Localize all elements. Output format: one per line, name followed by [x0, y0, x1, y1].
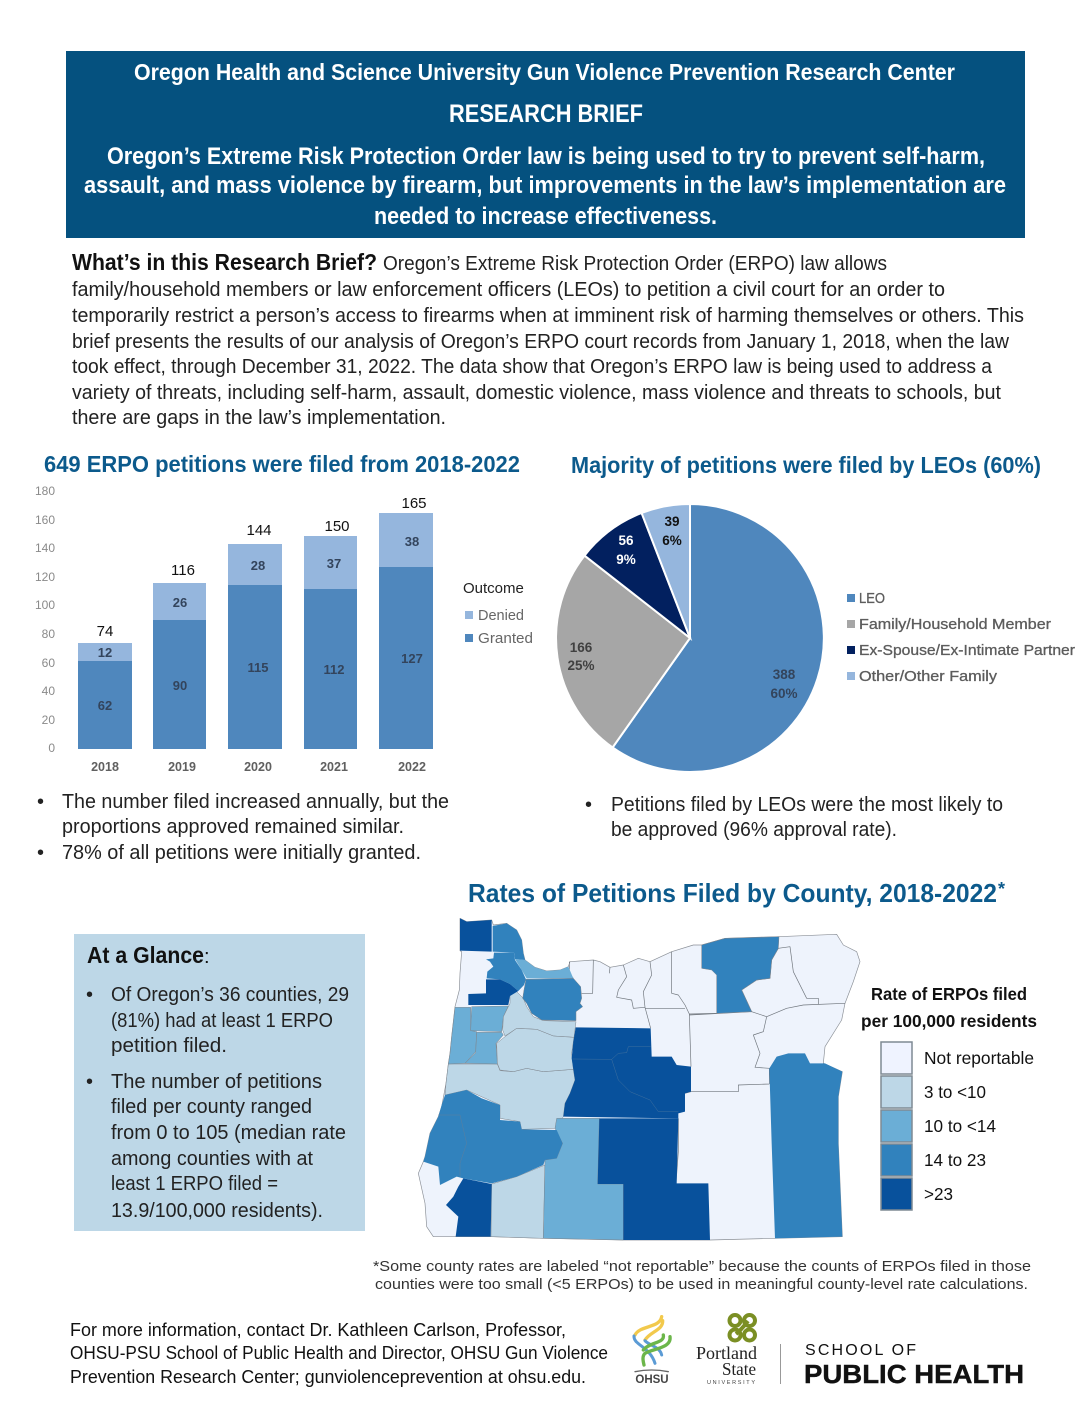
outcome legend: Granted: [478, 631, 533, 647]
logo: Portland State University: State: [722, 1359, 756, 1379]
bars 2022: 2022: [398, 760, 426, 774]
pie legend: LEO: [859, 591, 885, 607]
pie legend: [847, 591, 1075, 685]
bullet under pie chart: [585, 794, 1003, 841]
contact information: OHSU-PSU School of Public Health and Director, OHSU Gun Violence: [70, 1342, 608, 1363]
map legend: 14 to 23: [924, 1150, 986, 1170]
bullet under pie chart: Petitions filed by LEOs were the most likely to: [611, 794, 1003, 816]
bars 2022: 38: [405, 534, 419, 549]
bars 2018: 62: [98, 698, 112, 713]
counties: over 23: [446, 918, 710, 1240]
logo: Portland State University: UNIVERSITY: [707, 1380, 755, 1386]
logo: Portland State University: [696, 1315, 757, 1386]
bars 2020: 28: [251, 558, 265, 573]
bullets under bar chart: The number filed increased annually, but the: [62, 791, 449, 813]
bars 2018: 2018: [91, 760, 119, 774]
heading: county map: *: [998, 879, 1005, 899]
pie labels: 39: [664, 514, 680, 529]
intro text block: took effect, through December 31, 2022. The data show that Oregon’s ERPO law is being used to address a: [72, 356, 993, 378]
logo: School of Public Health: [804, 1342, 1024, 1389]
footnote: counties were too small (<5 ERPOs) to be used in meaningful county-level rate calculations.: [375, 1276, 1028, 1293]
bullets under bar chart: proportions approved remained similar.: [62, 816, 404, 838]
y axis labels: 80: [42, 627, 55, 641]
bars 2021: 112: [324, 662, 344, 677]
intro text block: brief presents the results of our analysis of Oregon’s ERPO court records from January 1, 2018, when the law: [72, 331, 1010, 353]
y axis labels: 100: [35, 598, 55, 612]
bullets under bar chart: 78% of all petitions were initially granted.: [62, 842, 421, 864]
at a glance panel: •: [86, 984, 93, 1006]
bullet under pie chart: be approved (96% approval rate).: [611, 819, 897, 841]
contact information: [70, 1319, 608, 1387]
bars 2021: [304, 518, 357, 774]
header: headline finding: needed to increase effectiveness.: [374, 203, 717, 230]
bars 2020: 115: [248, 660, 268, 675]
outcome legend: Denied: [478, 608, 524, 624]
choropleth map of Oregon counties: [418, 918, 860, 1240]
heading: petitions filed: 649 ERPO petitions were filed from 2018-2022: [44, 451, 520, 477]
pie legend: Family/Household Member: [859, 617, 1051, 633]
header: headline finding: [84, 143, 1006, 230]
bars 2019: 26: [173, 595, 187, 610]
bullets under bar chart: [37, 791, 449, 864]
intro text block: What’s in this Research Brief?: [72, 249, 377, 275]
logo: OHSU: [634, 1317, 670, 1386]
bars 2019: 116: [171, 562, 195, 579]
bars 2022: 165: [401, 495, 427, 512]
intro text block: variety of threats, including self-harm, assault, domestic violence, mass violence and threats to schools, but: [72, 382, 1001, 404]
logo: School of Public Health: SCHOOL OF: [805, 1342, 916, 1359]
at a glance panel: (81%) had at least 1 ERPO: [111, 1010, 333, 1032]
pie legend: Other/Other Family: [859, 669, 998, 685]
intro text block: Oregon’s Extreme Risk Protection Order (ERPO) law allows: [383, 253, 887, 275]
heading: county map: Rates of Petitions Filed by County, 2018-2022: [468, 878, 997, 908]
logo: OHSU: OHSU: [635, 1374, 669, 1386]
header banner: [66, 51, 1025, 238]
at a glance panel: 13.9/100,000 residents).: [111, 1200, 323, 1222]
map legend: Not reportable: [924, 1048, 1034, 1068]
bars 2021: 2021: [320, 760, 348, 774]
header: research brief label: RESEARCH BRIEF: [449, 100, 643, 128]
bullets under bar chart: •: [37, 791, 44, 813]
bars 2021: 37: [327, 556, 341, 571]
pie labels: 6%: [662, 533, 682, 548]
pie labels: 9%: [616, 552, 636, 567]
intro text block: family/household members or law enforcement officers (LEOs) to petition a civil court for an order to: [72, 279, 945, 301]
counties: 10 to under 14: [448, 959, 623, 1240]
y axis labels: 0: [48, 741, 55, 755]
pie labels: 60%: [770, 686, 798, 701]
y axis labels: 20: [42, 713, 55, 727]
outcome legend: Outcome: [463, 580, 524, 597]
map legend: Rate of ERPOs filed: [871, 984, 1027, 1004]
at a glance panel: [74, 934, 365, 1231]
counties: 14 to 23: [423, 923, 842, 1238]
map legend: >23: [924, 1184, 953, 1204]
map legend: [861, 984, 1037, 1210]
y axis labels: 180: [35, 484, 55, 498]
pie chart: petitioner type: [556, 504, 1075, 772]
at a glance panel: At a Glance: [87, 942, 204, 968]
bars 2019: 90: [173, 678, 187, 693]
at a glance panel: from 0 to 105 (median rate: [111, 1122, 346, 1144]
y axis labels: 60: [42, 656, 55, 670]
at a glance panel: least 1 ERPO filed =: [111, 1173, 278, 1195]
bars 2020: 144: [246, 522, 272, 539]
contact information: For more information, contact Dr. Kathleen Carlson, Professor,: [70, 1319, 566, 1340]
pie legend: Ex-Spouse/Ex-Intimate Partner: [859, 643, 1075, 659]
bars 2022: [379, 495, 433, 774]
y axis labels: 160: [35, 513, 55, 527]
header: headline finding: assault, and mass violence by firearm, but improvements in the law’s implementation are: [84, 172, 1006, 199]
logo: School of Public Health: PUBLIC HEALTH: [804, 1361, 1024, 1389]
header: organisation name: Oregon Health and Science University Gun Violence Prevention Research Center: [134, 59, 955, 85]
bars 2020: 2020: [244, 760, 272, 774]
counties: 3 to under 10: [445, 992, 576, 1238]
y axis labels: [35, 484, 55, 755]
map legend: per 100,000 residents: [861, 1011, 1037, 1031]
bars 2019: [153, 562, 206, 774]
pie labels: 388: [773, 667, 796, 682]
outcome legend: [463, 580, 533, 647]
bars 2018: [78, 623, 132, 774]
contact information: Prevention Research Center; gunviolenceprevention at ohsu.edu.: [70, 1366, 586, 1387]
bars 2019: 2019: [168, 760, 196, 774]
pie labels: 166: [570, 640, 593, 655]
county lines for low-rate counties: [569, 947, 845, 1183]
bars 2018: 74: [97, 623, 113, 640]
footnote: [373, 1258, 1031, 1293]
logo: Portland State University: Portland: [696, 1343, 757, 1363]
stacked bar chart: petitions by year and outcome: [35, 484, 533, 774]
at a glance panel: The number of petitions: [111, 1071, 322, 1093]
at a glance panel: filed per county ranged: [111, 1096, 312, 1118]
bars 2018: 12: [98, 645, 112, 660]
at a glance panel: :: [204, 946, 210, 968]
y axis labels: 120: [35, 570, 55, 584]
bars 2022: 127: [401, 651, 423, 666]
divider between logos: [780, 1344, 781, 1384]
intro text block: temporarily restrict a person’s access to firearms when at imminent risk of harming themselves or others. This: [72, 305, 1024, 327]
heading: majority filed by LEOs: Majority of petitions were filed by LEOs (60%): [571, 452, 1041, 478]
map legend: 10 to <14: [924, 1116, 996, 1136]
pie labels: [567, 514, 798, 701]
at a glance panel: petition filed.: [111, 1035, 227, 1057]
bullet under pie chart: •: [585, 794, 592, 816]
at a glance panel: Of Oregon’s 36 counties, 29: [111, 984, 349, 1006]
at a glance panel: •: [86, 1071, 93, 1093]
bars 2021: 150: [324, 518, 350, 535]
pie labels: 56: [618, 533, 634, 548]
bullets under bar chart: •: [37, 842, 44, 864]
pie labels: 25%: [567, 658, 595, 673]
intro text block: [72, 249, 1024, 429]
y axis labels: 40: [42, 684, 55, 698]
y axis labels: 140: [35, 541, 55, 555]
footnote: *Some county rates are labeled “not reportable” because the counts of ERPOs filed in those: [373, 1258, 1031, 1275]
intro text block: there are gaps in the law’s implementation.: [72, 407, 446, 429]
header: headline finding: Oregon’s Extreme Risk Protection Order law is being used to try to prevent self-harm,: [107, 143, 985, 170]
bars 2020: [228, 522, 282, 774]
at a glance panel: among counties with at: [111, 1148, 313, 1170]
map legend: 3 to <10: [924, 1082, 986, 1102]
